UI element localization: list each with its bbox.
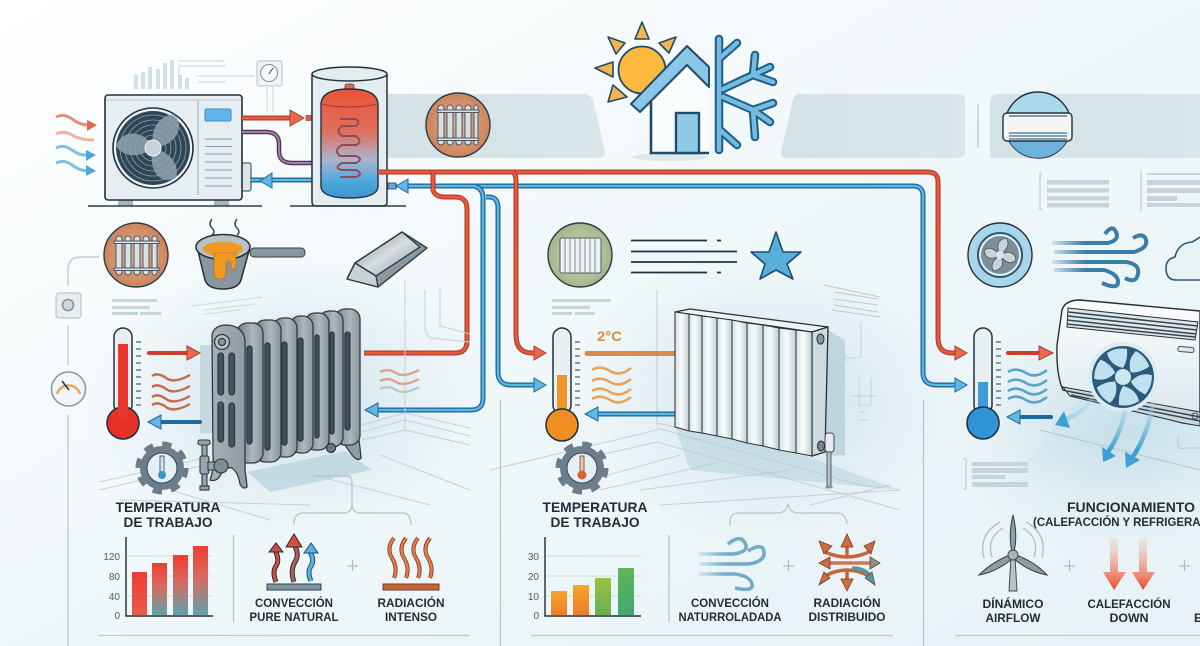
plus [1064, 560, 1075, 571]
plus [783, 560, 794, 571]
icon: radiator badge left [104, 223, 168, 287]
plus [1179, 560, 1190, 571]
caption: radiacion distribuido [808, 595, 886, 624]
icon: radiator badge header [426, 93, 490, 157]
bracket panel 1 [294, 476, 411, 525]
label: 2°C: 2°C [597, 328, 622, 344]
left side rail with gauge [52, 257, 99, 646]
air intake wavy arrows [56, 115, 97, 176]
caption: radiacion intenso [378, 595, 444, 624]
icon: distributed radiation arrows [819, 534, 880, 591]
bottom rule panel 1 [98, 634, 470, 636]
air conditioner unit [1000, 300, 1200, 490]
bracket panel 2 [730, 504, 847, 526]
divider header [977, 104, 979, 148]
bar chart panel 1 [103, 537, 213, 622]
caption: dinamico airflow: AIRFLOW [986, 611, 1041, 625]
icon: air conditioner badge [1003, 92, 1072, 158]
outdoor heat pump unit [88, 95, 262, 206]
icon: metal ingot [347, 232, 427, 287]
bar chart panel 1: 0 [114, 611, 120, 622]
faded notes panel 2 [552, 285, 880, 430]
header band: centre [781, 94, 965, 158]
bar chart panel 1: 120 [103, 552, 120, 563]
bar chart panel 2: 20 [528, 572, 539, 583]
icon: melting cast iron pot [196, 219, 305, 289]
flow arrows radiator 2 [585, 354, 676, 421]
valve [198, 440, 228, 490]
bar chart panel 2: 10 [528, 592, 539, 603]
caption: conveccion pure natural [250, 595, 338, 624]
caption: conveccion naturroladada: NATURROLADADA [678, 610, 782, 624]
thermometer: cool [967, 328, 1001, 439]
caption: calefaccion down: DOWN [1110, 611, 1148, 625]
bar chart panel 1: 40 [109, 592, 120, 603]
icon: panel radiator badge [548, 223, 612, 287]
plus [347, 560, 358, 571]
bar chart panel 2: 0 [533, 611, 539, 622]
flow arrows AC [1007, 346, 1053, 424]
thermometer: warm [546, 328, 580, 441]
divider panel 2 [500, 400, 502, 646]
bottom rule panel 3 [955, 634, 1200, 636]
heading: temperatura panel 1: TEMPERATURA [116, 499, 220, 515]
icon: rating lines [631, 240, 737, 272]
heading: temperatura panel 2: DE TRABAJO [550, 514, 640, 530]
radiator: cast iron [200, 309, 372, 492]
caption: calefaccion down: CALEFACCIÓN [1088, 596, 1170, 611]
thermometer: hot [107, 328, 141, 439]
pipes between unit and tank [242, 110, 322, 188]
buffer tank [290, 67, 406, 206]
header band: right [990, 94, 1200, 158]
heading: funcionamiento [1033, 499, 1200, 529]
icon: natural convection [267, 534, 321, 590]
bar chart panel 2 [528, 537, 641, 622]
heading: funcionamiento: FUNCIONAMIENTO [1067, 499, 1195, 515]
icon: wind turbine [979, 515, 1047, 591]
bar chart panel 1: 80 [109, 572, 120, 583]
icon: wind gusts [1052, 228, 1146, 286]
heading: temperatura panel 1: DE TRABAJO [124, 514, 213, 530]
faded text placeholders right [1039, 171, 1200, 211]
caption: conveccion naturroladada [678, 595, 782, 624]
divider [232, 535, 234, 622]
main pipes [364, 172, 967, 417]
divider panel 3 [922, 400, 924, 646]
caption: radiacion intenso: INTENSO [385, 610, 437, 624]
icon: star [751, 232, 801, 279]
heading: temperatura panel 2: TEMPERATURA [542, 499, 648, 515]
icon: wind convection [698, 539, 764, 589]
icon: fan badge [968, 223, 1032, 287]
icon: heating down arrows [1103, 538, 1155, 590]
wall and floor line art panel 2 [490, 423, 900, 510]
bar chart panel 2: 30 [528, 552, 539, 563]
caption: radiacion distribuido: DISTRIBUIDO [808, 610, 886, 624]
caption: conveccion pure natural: PURE NATURAL [250, 610, 338, 624]
caption: conveccion naturroladada: CONVECCIÓN [691, 595, 769, 610]
icon: cloud [1166, 237, 1200, 280]
faded notes left [112, 297, 262, 315]
icon: decorative bar signal above outdoor unit [134, 60, 254, 89]
caption: calefaccion down [1088, 596, 1170, 625]
divider [668, 535, 670, 622]
header band: left [388, 94, 605, 158]
faded notes AC [963, 459, 1028, 489]
caption: radiacion distribuido: RADIACIÓN [814, 595, 880, 610]
radiator: panel [675, 309, 900, 490]
caption: dinamico airflow: DÍNÁMICO [982, 596, 1044, 611]
wall and floor line art left [100, 280, 470, 520]
flow arrows radiator 1 [148, 346, 419, 429]
icon: intense radiation [383, 538, 439, 590]
icon: wall gauge [257, 61, 282, 113]
heading: temperatura panel 1 [116, 499, 220, 530]
icon: house with sun and snowflake [595, 22, 773, 161]
icon: gear thermometer hot panel [138, 444, 186, 492]
caption: conveccion pure natural: CONVECCIÓN [255, 595, 333, 610]
caption: radiacion intenso: RADIACIÓN [378, 595, 444, 610]
heading: temperatura panel 2 [542, 499, 648, 530]
caption: dinamico airflow [982, 596, 1044, 625]
bottom rule panel 2 [531, 634, 893, 636]
icon: gear thermometer warm panel [558, 444, 606, 492]
